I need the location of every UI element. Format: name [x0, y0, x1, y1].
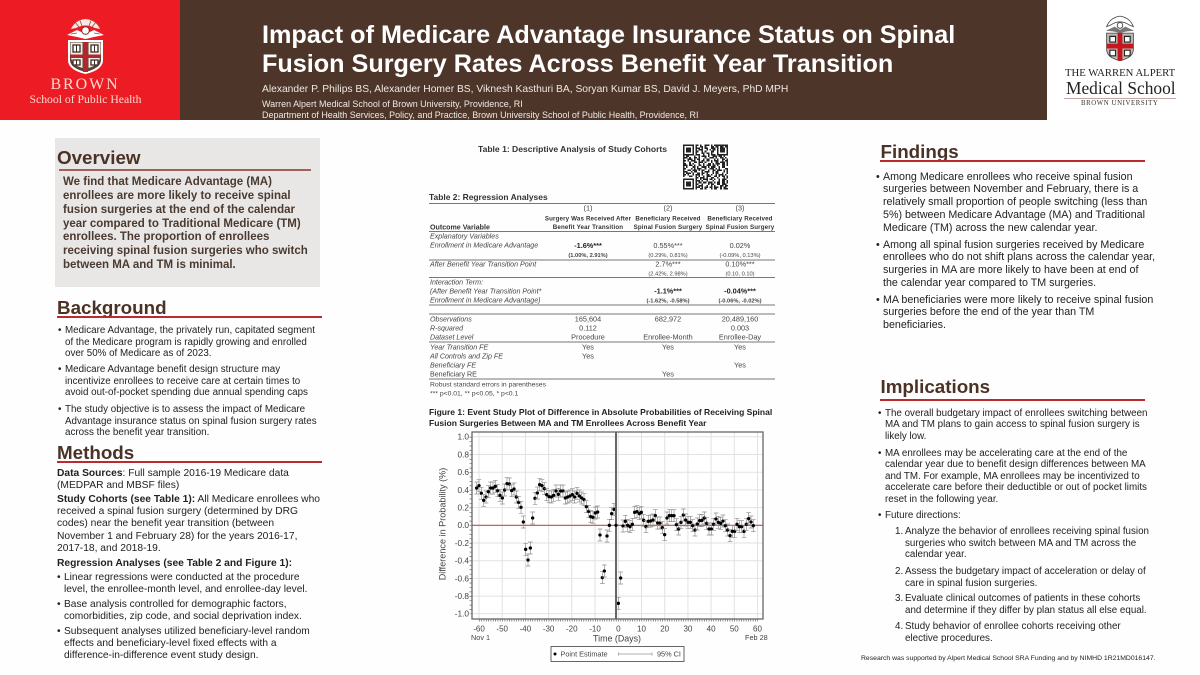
text: overview summary: enrollees. The proportion of enrollees — [63, 231, 269, 243]
panel: implications: 2. — [895, 566, 903, 577]
implications bullet 2 — [878, 448, 1147, 505]
implications bullet 1: The overall budgetary impact of enrollees switching between — [885, 408, 1147, 418]
panel: background — [57, 296, 322, 438]
table values: Yes — [582, 352, 594, 360]
background bullet 3: The study objective is to assess the impact of Medicare — [65, 404, 305, 415]
x axis tick labels: 30 — [683, 624, 693, 634]
heading: Figure 1: Figure 1: Event Study Plot of Difference in Absolute Probabilities of Receiving Spinal — [429, 407, 772, 417]
future direction 4 — [895, 621, 1121, 644]
table values: Yes — [662, 342, 674, 352]
implications bullet 2: accelerate care before their deductible or out of pocket limits — [885, 482, 1147, 493]
x axis tick labels: 0 — [616, 624, 621, 634]
background bullet 1: of the Medicare program is rapidly growing and enrolled — [65, 337, 307, 348]
table values: Yes — [582, 342, 594, 352]
findings bullet 3: beneficiaries. — [883, 319, 946, 331]
text: study cohorts: Study Cohorts (see Table 1): All Medicare enrollees who — [57, 494, 320, 505]
panel: background: • — [58, 404, 61, 415]
x axis tick labels: 50 — [730, 624, 739, 634]
findings bullet 3 — [876, 294, 1153, 331]
affiliations: Warren Alpert Medical School of Brown University, Providence, RI — [262, 98, 523, 108]
background bullet 1: over 50% of Medicare as of 2023. — [65, 348, 212, 359]
table values — [568, 241, 762, 378]
table values: -1.1%*** — [654, 286, 682, 296]
findings bullet 2: the calendar year compared to TM surgeries. — [883, 277, 1096, 289]
table footnotes: Robust standard errors in parentheses — [430, 382, 547, 388]
panel: Warren Alpert Medical School logo — [1047, 0, 1200, 120]
future direction 2: Assess the budgetary impact of acceleration or delay of — [905, 566, 1146, 577]
implications bullet 3: Future directions: — [885, 510, 961, 520]
background bullet 2: avoid out-of-pocket spending due annual spending caps — [65, 387, 308, 398]
table: regression analyses — [429, 192, 775, 398]
heading: Background: Background — [57, 296, 167, 318]
table values: (0.10, 0.10) — [725, 272, 755, 278]
table 2 title: Table 2: Regression Analyses — [429, 192, 548, 202]
table values: 0.02% — [730, 241, 751, 250]
column headers: Beneficiary Received — [635, 216, 701, 222]
table values: Enrollee-Month — [643, 332, 693, 342]
zero reference line — [472, 524, 763, 526]
implications bullet 2: reset in the following year. — [885, 494, 998, 505]
funding note: Research was supported by Alpert Medical School SRA Funding and by NIMHD 1R21MD016147. — [861, 655, 1156, 662]
table values: 20,489,160 — [722, 314, 758, 324]
x axis tick labels: -40 — [520, 624, 532, 634]
text: overview summary: We find that Medicare Advantage (MA) — [63, 176, 272, 188]
table values: -1.6%*** — [574, 241, 602, 250]
table values: (-1.62%, -0.58%) — [646, 298, 690, 304]
plot frame and axes — [470, 432, 763, 620]
panel: methods: • — [57, 626, 61, 637]
title — [262, 21, 955, 78]
panel: findings: • — [876, 294, 880, 306]
column headers: (1) — [584, 204, 592, 212]
legend: 95% CI — [657, 650, 681, 658]
title: Impact of Medicare Advantage Insurance Status on Spinal — [262, 21, 955, 49]
x axis tick labels: 60 — [753, 624, 762, 634]
findings bullet 1: relatively small proportion of people switching (less than — [883, 196, 1147, 208]
future direction 4: elective procedures. — [905, 633, 993, 644]
column headers — [545, 204, 775, 231]
text: overview summary: enrollees are more likely to receive spinal — [63, 190, 291, 202]
heading: Findings: Findings — [880, 140, 959, 162]
panel: methods: • — [57, 599, 61, 610]
divider — [1064, 98, 1176, 99]
legend: Point Estimate — [560, 650, 608, 658]
y axis tick labels: 0.0 — [457, 520, 469, 530]
panel: background: • — [58, 364, 61, 375]
text: overview summary: fusion surgeries at the end of the calendar — [63, 204, 295, 216]
text: study cohorts: November 1 and February 28) for the years 2016-17, — [57, 531, 297, 542]
methods bullet 1: Linear regressions were conducted at the procedure — [64, 572, 300, 583]
text: data sources: (MEDPAR and MBSF files) — [57, 480, 179, 491]
table values: 165,604 — [575, 314, 601, 324]
column headers: Beneficiary Received — [707, 216, 773, 222]
table values: Enrollee-Day — [719, 332, 761, 342]
table values: 0.55%*** — [653, 241, 683, 250]
future direction 2 — [895, 566, 1146, 589]
text: study cohorts: received a spinal fusion surgery (determined by DRG — [57, 506, 298, 517]
future direction 1: Analyze the behavior of enrollees receiving spinal fusion — [905, 526, 1149, 537]
y axis tick labels: -0.6 — [455, 573, 469, 583]
row labels: (After Benefit Year Transition Point* — [430, 288, 542, 296]
authors: Alexander P. Philips BS, Alexander Homer BS, Viknesh Kasthuri BA, Soryan Kumar BS, David J. Meyers, PhD MPH — [262, 84, 788, 95]
background underline — [57, 316, 322, 318]
future direction 3: Evaluate clinical outcomes of patients in these cohorts — [905, 593, 1140, 604]
x axis tick labels: 10 — [637, 624, 646, 634]
y axis tick labels: -0.8 — [455, 591, 469, 601]
text: overview summary: year compared to Traditional Medicare (TM) — [63, 218, 301, 230]
row labels — [429, 224, 542, 378]
table values: 2.7%*** — [655, 260, 681, 268]
future direction 1: calendar year. — [905, 549, 967, 560]
text: The Warren Alpert: THE WARREN ALPERT — [1065, 67, 1175, 79]
methods bullet 2: Base analysis controlled for demographic factors, — [64, 599, 287, 610]
icon: QR code — [683, 144, 728, 190]
x axis tick labels: -60 — [473, 624, 485, 634]
y axis tick labels: 0.8 — [457, 449, 469, 459]
table values: 682,972 — [655, 314, 681, 324]
row labels: Observations — [430, 316, 472, 324]
background bullet 3: Advantage insurance status on spinal fusion surgery rates — [65, 416, 317, 427]
data points with confidence intervals — [474, 478, 756, 609]
column headers: (3) — [736, 204, 744, 212]
findings bullet 2 — [876, 238, 1155, 289]
icon: Brown crest — [67, 19, 104, 74]
methods bullet 2: comorbidities, zip code, and social deprivation index. — [64, 611, 302, 622]
legend — [551, 646, 684, 662]
table values: (0.29%, 0.81%) — [648, 253, 688, 259]
x axis tick labels: -30 — [543, 624, 555, 634]
text: data sources — [57, 468, 289, 491]
row labels: Dataset Level — [430, 334, 474, 342]
row labels: Year Transition FE — [430, 344, 488, 352]
row labels: R-squared — [430, 324, 464, 332]
table values: 0.10%*** — [725, 260, 755, 268]
x axis tick labels: -50 — [496, 624, 509, 634]
text: study cohorts: 2017-18, and 2018-19. — [57, 543, 161, 554]
chart: event study plot — [438, 431, 768, 662]
methods bullet 3 — [57, 626, 310, 661]
panel: background: • — [58, 325, 61, 336]
column headers: Spinal Fusion Surgery — [634, 224, 703, 231]
x axis title: Time (Days) — [593, 634, 641, 644]
background bullet 1: Medicare Advantage, the privately run, capitated segment — [65, 325, 315, 336]
text: study cohorts: codes) near the benefit year transition (between — [57, 518, 274, 529]
text: Brown University: BROWN UNIVERSITY — [1081, 100, 1158, 107]
panel: implications: 4. — [895, 621, 903, 632]
panel: methods: • — [57, 572, 61, 583]
panel: implications — [878, 376, 1149, 644]
header band — [0, 0, 1047, 120]
text: overview summary — [63, 176, 308, 271]
table values: -0.04%*** — [724, 286, 756, 296]
text: data sources: Data Sources: Full sample 2016-19 Medicare data — [57, 468, 289, 479]
implications bullet 1: MA and TM plans to gain access to spinal fusion surgery is — [885, 419, 1140, 430]
x axis tick labels — [473, 624, 762, 634]
text: study cohorts — [57, 494, 320, 554]
findings bullet 1 — [876, 170, 1147, 234]
background bullet 2: Medicare Advantage benefit design structure may — [65, 364, 280, 375]
heading: Implications: Implications — [880, 376, 990, 396]
column headers: Surgery Was Received After — [545, 216, 632, 222]
table values: Yes — [662, 370, 674, 378]
plot background and grid — [472, 432, 763, 619]
y axis tick labels — [455, 432, 469, 619]
methods bullet 3: Subsequent analyses utilized beneficiary-level random — [64, 626, 310, 637]
implications bullet 1 — [878, 408, 1147, 442]
x axis end labels — [471, 633, 768, 642]
overview underline — [59, 169, 311, 171]
findings bullet 1: Medicare (TM) across the new calendar year. — [883, 222, 1097, 234]
methods bullet 2 — [57, 599, 302, 622]
heading: Table 1: Table 1: Descriptive Analysis of Study Cohorts — [478, 144, 667, 154]
background bullet 2 — [58, 364, 308, 398]
text: overview summary: between MA and TM is minimal. — [63, 259, 236, 271]
row labels: Interaction Term: — [430, 278, 483, 286]
methods bullet 3: effects and beneficiary-level fixed effects with a — [64, 638, 277, 649]
column headers: Benefit Year Transition — [553, 224, 623, 231]
findings bullet 2: enrollees who do not shift plans across the calendar year, — [883, 251, 1155, 263]
implications bullet 1: likely low. — [885, 431, 926, 442]
title: Fusion Surgery Rates Across Benefit Year Transition — [262, 50, 893, 78]
y axis tick labels: 0.2 — [457, 502, 469, 512]
table values: (1.00%, 2.91%) — [568, 253, 608, 259]
row labels: Enrollment in Medicare Advantage) — [430, 296, 541, 304]
findings bullet 2: Among all spinal fusion surgeries received by Medicare — [883, 238, 1144, 250]
findings underline — [880, 160, 1145, 162]
affiliations — [262, 98, 699, 120]
heading: Overview: Overview — [57, 147, 141, 168]
table values: Yes — [734, 360, 746, 370]
row labels: Explanatory Variables — [430, 232, 499, 240]
panel: findings: • — [876, 238, 880, 250]
future direction 3 — [895, 593, 1147, 616]
table values: 0.112 — [579, 324, 597, 332]
findings bullet 1: surgeries between November and February, there is a — [883, 183, 1138, 195]
future direction 1: surgeries who switch between MA and TM across the — [905, 538, 1136, 549]
day-of-transition marker — [614, 524, 618, 527]
background bullet 3 — [58, 404, 317, 438]
findings bullet 1: 5%) between Medicare Advantage (MA) and Traditional — [883, 209, 1145, 221]
heading: Figure 1 — [429, 407, 772, 428]
future direction 1 — [895, 526, 1149, 560]
y axis tick labels: -1.0 — [455, 609, 469, 619]
table values: Yes — [734, 342, 746, 352]
text: School of Public Health: School of Public Health — [30, 93, 142, 106]
background bullet 3: across the benefit year transition. — [65, 427, 209, 438]
future direction 4: Study behavior of enrollee cohorts receiving other — [905, 621, 1121, 632]
findings bullet 3: MA beneficiaries were more likely to receive spinal fusion — [883, 294, 1153, 306]
panel: findings — [876, 140, 1155, 331]
findings bullet 3: surgeries before the end of the year than TM — [883, 306, 1094, 318]
heading: Figure 1: Fusion Surgeries Between MA and TM Enrollees Across Benefit Year — [429, 418, 706, 428]
row labels: Beneficiary RE — [430, 370, 477, 378]
row labels: All Controls and Zip FE — [429, 352, 503, 360]
panel: methods — [57, 442, 322, 661]
row labels: After Benefit Year Transition Point — [429, 260, 537, 268]
x axis end labels: Nov 1 — [471, 633, 490, 642]
panel: implications: • — [878, 510, 881, 520]
background bullet 1 — [58, 325, 315, 359]
row labels: Enrollment in Medicare Advantage — [430, 242, 538, 250]
findings bullet 1: Among Medicare enrollees who receive spinal fusion — [883, 170, 1133, 182]
text: regression analyses heading: Regression Analyses (see Table 2 and Figure 1): — [57, 558, 292, 569]
x axis tick labels: 20 — [660, 624, 670, 634]
y axis tick labels: 1.0 — [457, 432, 469, 442]
methods bullet 1: level, the enrollee-month level, and enrollee-day level. — [64, 584, 308, 595]
x axis tick labels: -10 — [589, 624, 601, 634]
column headers: Spinal Fusion Surgery — [706, 224, 775, 231]
table values: Procedure — [571, 332, 605, 342]
table values: (-0.06%, -0.02%) — [718, 298, 762, 304]
panel: implications: • — [878, 408, 881, 418]
future direction 3: and determine if they differ by plan status all else equal. — [905, 605, 1147, 616]
methods bullet 1 — [57, 572, 308, 595]
row labels: Beneficiary FE — [430, 362, 476, 370]
panel: implications: 1. — [895, 526, 903, 537]
implications bullet 2: calendar year due to benefit design differences between MA — [885, 459, 1146, 470]
panel: findings: • — [876, 170, 880, 182]
y axis tick labels: -0.4 — [455, 556, 469, 566]
text: overview summary: receiving spinal fusion surgeries who switch — [63, 245, 308, 257]
implications bullet 2: and TM. For example, MA enrollees may be incentivized to — [885, 471, 1140, 482]
methods underline — [57, 461, 322, 463]
table values: (-0.09%, 0.13%) — [719, 253, 761, 259]
panel: implications: • — [878, 448, 881, 458]
y axis tick labels: 0.6 — [457, 467, 469, 477]
y axis title: Difference in Probability (%) — [438, 468, 448, 580]
implications bullet 2: MA enrollees may be accelerating care at the end of the — [885, 448, 1127, 458]
panel: overview — [55, 138, 320, 287]
table values: (2.42%, 2.98%) — [648, 272, 688, 278]
x axis end labels: Feb 28 — [745, 633, 768, 642]
column headers: (2) — [664, 204, 672, 212]
text: BROWN: BROWN — [50, 76, 120, 93]
table rules — [429, 204, 775, 379]
text: Medical School: Medical School — [1066, 78, 1176, 98]
methods bullet 3: difference-in-difference event study design. — [64, 650, 258, 661]
icon: Medical School crest — [1106, 16, 1134, 62]
panel: implications: 3. — [895, 593, 903, 604]
affiliations: Department of Health Services, Policy, and Practice, Brown University School of Public Health, Providence, RI — [262, 110, 699, 120]
x axis tick labels: 40 — [707, 624, 716, 634]
row labels: Outcome Variable — [430, 224, 490, 232]
background bullet 2: incentivize enrollees to receive care at certain times to — [65, 376, 300, 387]
panel: Brown School of Public Health logo — [0, 0, 180, 120]
y axis tick labels: 0.4 — [457, 485, 469, 495]
findings bullet 2: surgeries in MA are more likely to have been at end of — [883, 264, 1138, 276]
table values: 0.003 — [731, 324, 749, 332]
heading: Methods: Methods — [57, 442, 134, 462]
implications underline — [880, 399, 1145, 401]
table footnotes: *** p<0.01, ** p<0.05, * p<0.1 — [430, 390, 518, 398]
table footnotes — [430, 382, 547, 398]
y axis tick labels: -0.2 — [455, 538, 469, 548]
x axis tick labels: -20 — [566, 624, 578, 634]
future direction 2: care in spinal fusion surgeries. — [905, 578, 1037, 589]
